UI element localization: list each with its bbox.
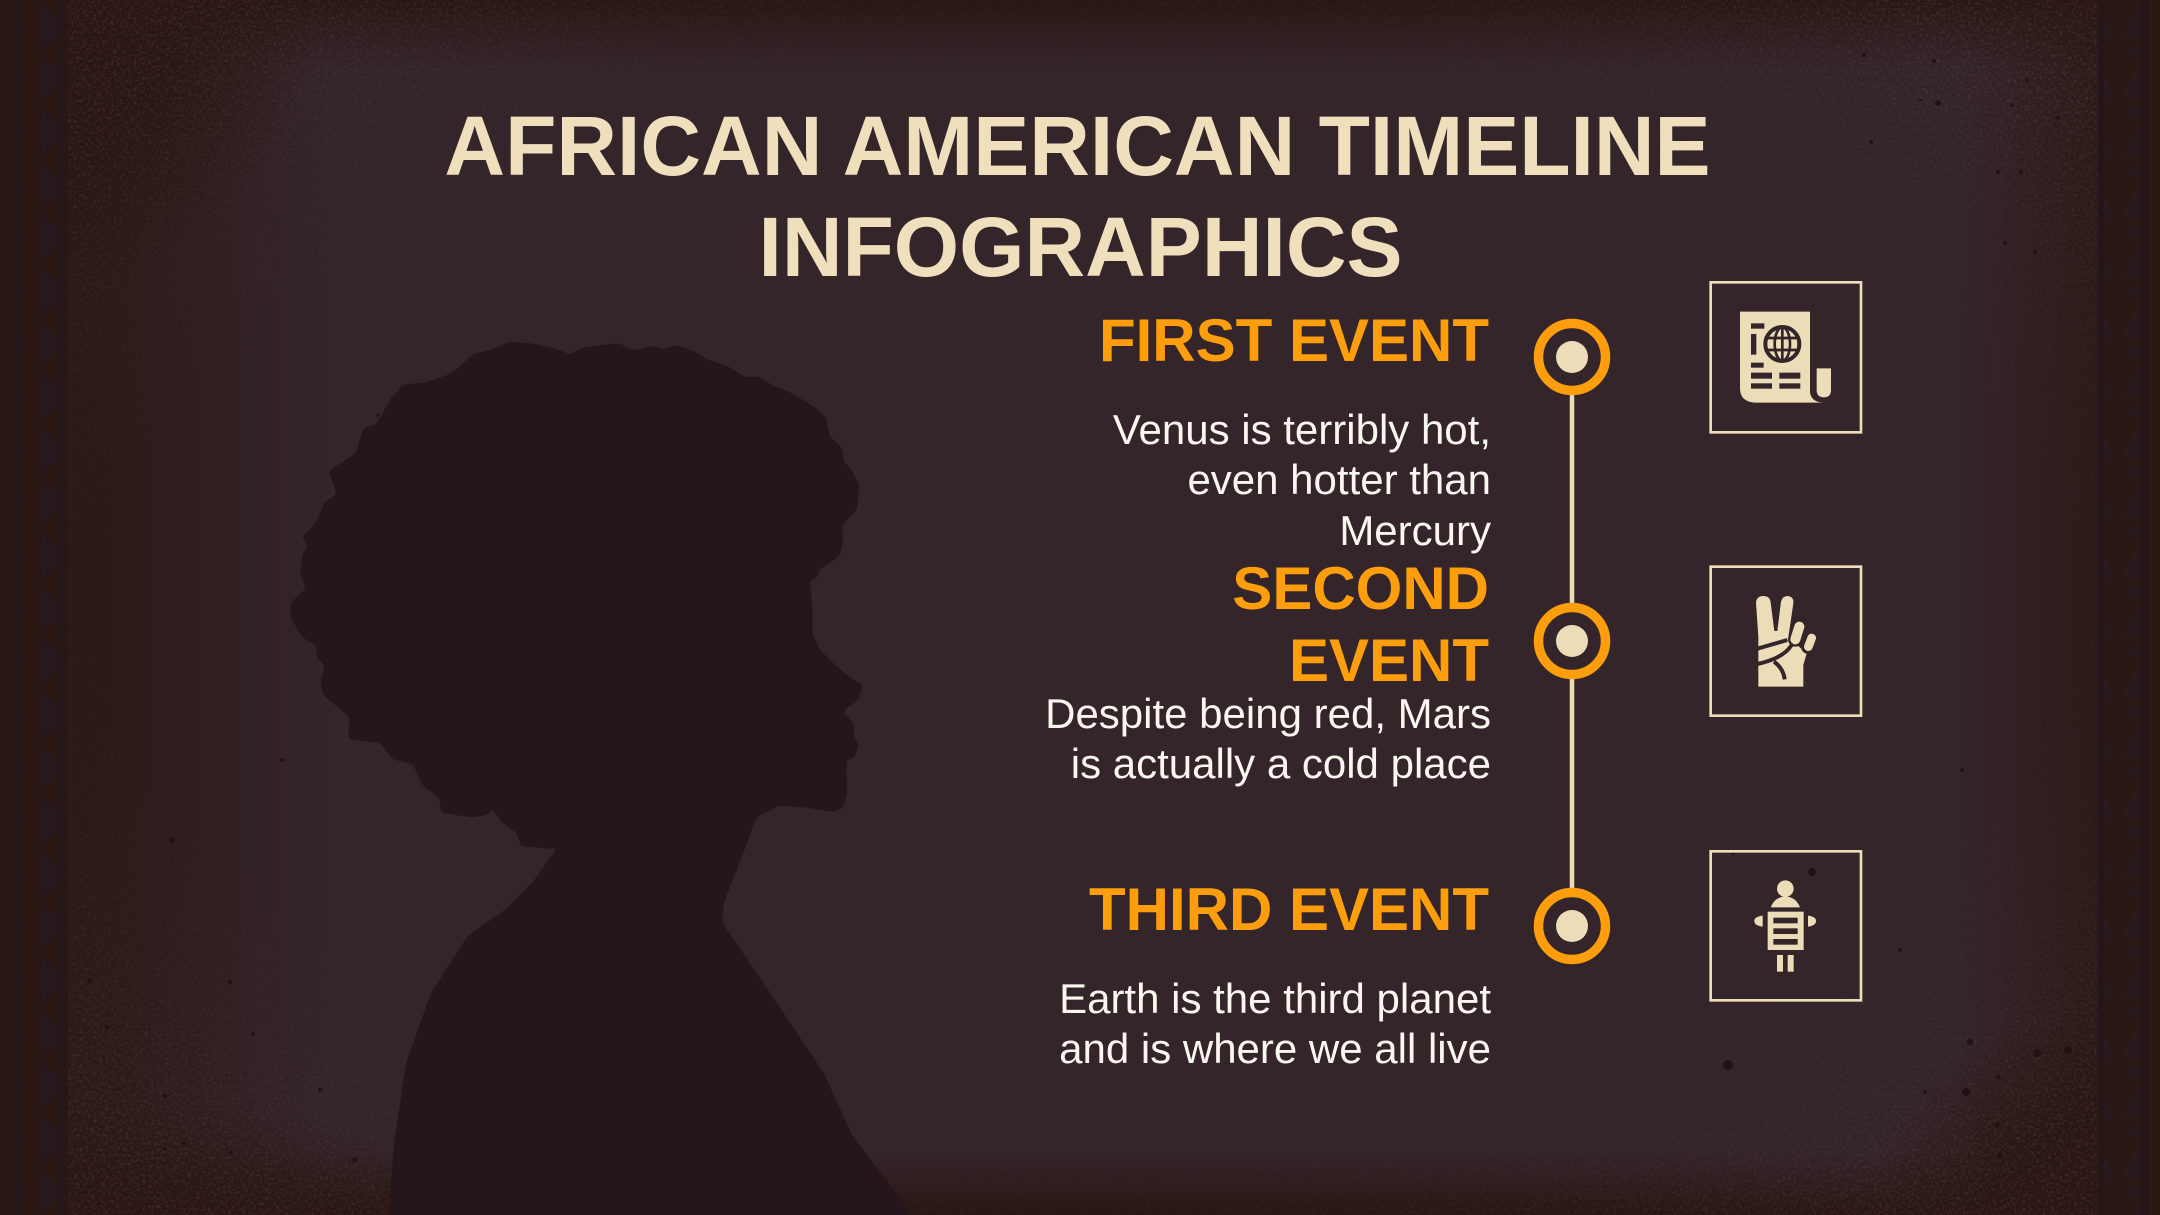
marker 3 xyxy=(1538,892,1606,960)
event 2 heading: SECOND xyxy=(1232,555,1489,622)
title: AFRICAN AMERICAN TIMELINE xyxy=(444,99,1711,193)
title: INFOGRAPHICS xyxy=(758,200,1403,294)
event 1 description: even hotter than xyxy=(1187,456,1491,503)
timeline connector line xyxy=(1570,392,1574,892)
icon box 3: person holding sign xyxy=(1711,851,1861,1000)
event 1 description: Mercury xyxy=(1339,507,1491,554)
marker 2 xyxy=(1538,608,1606,674)
event 2 heading xyxy=(1232,555,1489,694)
event 3 description xyxy=(1059,975,1491,1072)
event 2 description: Despite being red, Mars xyxy=(1045,690,1491,737)
event 2 heading: EVENT xyxy=(1289,627,1489,694)
event 2 description: is actually a cold place xyxy=(1071,740,1491,787)
event 1 heading: FIRST EVENT xyxy=(1099,307,1489,374)
event 3 description: and is where we all live xyxy=(1059,1025,1491,1072)
event 1 description: Venus is terribly hot, xyxy=(1113,406,1491,453)
event 3 description: Earth is the third planet xyxy=(1059,975,1491,1022)
event 3 heading: THIRD EVENT xyxy=(1089,876,1489,943)
icon box 1: newspaper xyxy=(1711,282,1861,432)
icon box 2: peace hand xyxy=(1711,567,1861,716)
event 2 description xyxy=(1045,690,1491,787)
title xyxy=(444,99,1711,294)
marker 1 xyxy=(1538,324,1606,390)
event 1 description xyxy=(1113,406,1491,554)
